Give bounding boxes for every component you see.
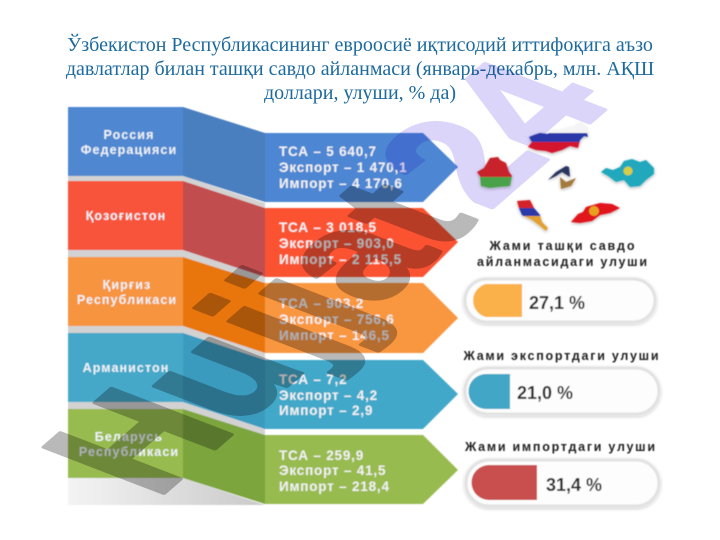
progress pill: 31,4 %: 31,4 % (546, 475, 602, 495)
icon: Kyrgyzstan map (571, 203, 620, 223)
progress pill: 21,0 %: 21,0 % (517, 383, 573, 403)
icon: Kazakhstan map (601, 159, 654, 187)
band: Belarus: Беларусь (95, 430, 163, 444)
watermark: Hujjat24 (0, 40, 654, 515)
band: Belarus: ТСА – 259,9 (279, 448, 364, 463)
progress pill: 27,1 % (465, 279, 655, 322)
band: Belarus: Экспорт – 41,5 (279, 463, 386, 478)
band: Kyrgyzstan: Қирғиз (103, 278, 151, 292)
band: Kazakhstan (68, 181, 458, 277)
icon: EAEU emblem (548, 166, 576, 189)
band: Russia (68, 107, 458, 202)
progress pill: 31,4 % (466, 460, 659, 506)
band: Belarus: Республикаси (79, 445, 179, 459)
band: Russia: Россия (104, 128, 154, 142)
band: Kazakhstan: Экспорт – 903,0 (279, 236, 395, 251)
band: Kyrgyzstan: ТСА – 903,2 (279, 296, 364, 311)
band: Russia: Импорт – 4 170,6 (279, 176, 403, 191)
band: Armenia: Импорт – 2,9 (279, 403, 373, 418)
band: Kazakhstan: ТСА – 3 018,5 (279, 220, 377, 235)
icon: Russia map (526, 120, 590, 154)
icon: Belarus map (475, 155, 515, 189)
band: Armenia: ТСА – 7,2 (279, 372, 347, 387)
band: Russia: Экспорт – 1 470,1 (279, 160, 407, 175)
band: Belarus: Импорт – 218,4 (279, 479, 390, 494)
band: Belarus (68, 409, 458, 504)
band: Kyrgyzstan: Республикаси (77, 293, 177, 307)
floor shadow (68, 478, 265, 505)
band: Kazakhstan: Қозоғистон (86, 209, 166, 223)
band: Russia: Федерацияси (81, 143, 177, 157)
band: Armenia: Экспорт – 4,2 (279, 388, 378, 403)
band: Kyrgyzstan: Экспорт – 756,6 (279, 312, 395, 327)
band: Armenia: Арманистон (83, 361, 169, 375)
heading: import share: Жами импортдаги улуши (464, 440, 655, 454)
icon: Armenia map (515, 198, 550, 232)
band: Kyrgyzstan (68, 257, 458, 353)
band: Kyrgyzstan: Импорт – 146,5 (279, 328, 390, 343)
heading: total turnover share (477, 239, 647, 269)
infographic graphics (41, 62, 662, 510)
progress pill: 27,1 %: 27,1 % (529, 293, 585, 313)
heading: total turnover share: Жами ташқи савдо (488, 239, 635, 253)
band: Kazakhstan: Импорт – 2 115,5 (279, 252, 402, 267)
band: Armenia (68, 333, 458, 429)
heading: export share: Жами экспортдаги улуши (462, 349, 658, 363)
separator shadows (68, 176, 265, 435)
band: Russia: ТСА – 5 640,7 (279, 144, 377, 159)
title: Ўзбекистон Республикасининг евроосиё иқтисодий иттифоқига аъзо давлатлар билан ташқи савдо айланмаси (январь-декабрь, млн. АҚШ доллари, улуши, % да) (66, 34, 654, 104)
progress pill: 21,0 % (465, 368, 659, 414)
heading: total turnover share: айланмасидаги улуши (477, 255, 647, 269)
